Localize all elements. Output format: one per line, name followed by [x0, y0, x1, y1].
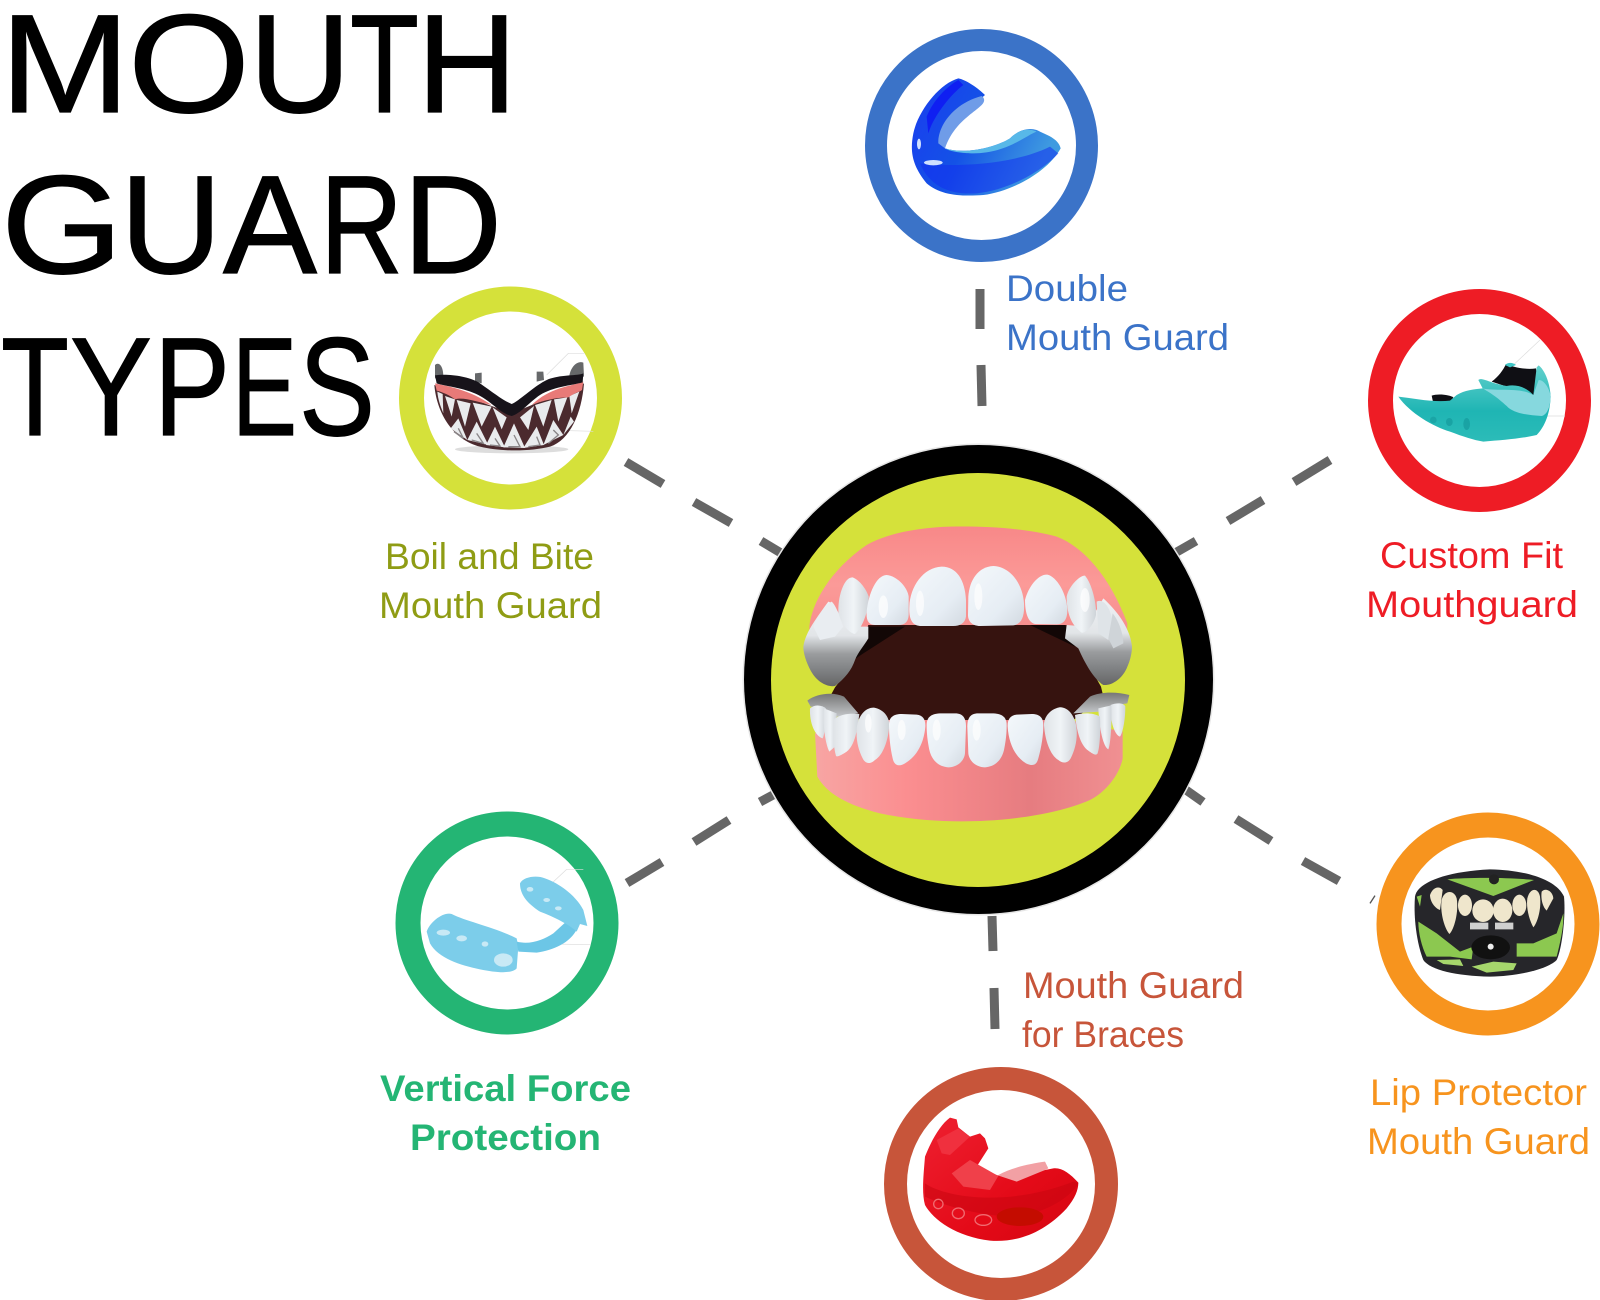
panel: boil and bite guard — [379, 299, 610, 626]
label: vertical force protection: Vertical Force — [380, 1068, 631, 1109]
label: double mouth guard: Double — [1006, 268, 1128, 309]
icon: green monster guard — [1370, 869, 1564, 977]
label: lip protector mouth guard: Mouth Guard — [1367, 1121, 1590, 1162]
title — [0, 0, 517, 465]
connector: lower right dashes — [1186, 790, 1339, 881]
title: T — [1, 308, 69, 465]
connector: top dashes — [980, 289, 982, 406]
ring: red — [1380, 302, 1578, 500]
panel: mouth guard for braces — [896, 965, 1244, 1290]
title: R — [320, 146, 403, 303]
title: U — [120, 146, 222, 303]
label: mouth guard for braces: for Braces — [1022, 1014, 1184, 1055]
connector: bottom dashes — [992, 916, 995, 1029]
icon: teal mouth guard — [1398, 340, 1565, 442]
ring: brown-orange — [896, 1078, 1106, 1290]
title: G — [1, 146, 123, 303]
connector: lower left dashes — [627, 795, 773, 883]
panel: custom fit mouthguard — [1366, 302, 1578, 625]
label: custom fit mouthguard: Custom Fit — [1380, 535, 1564, 576]
icon: light blue guard — [427, 869, 590, 972]
ring: orange — [1389, 825, 1587, 1023]
label: mouth guard for braces: Mouth Guard — [1023, 965, 1244, 1006]
panel: vertical force protection — [380, 824, 631, 1158]
panel: double mouth guard — [876, 40, 1229, 358]
connector: upper right dashes — [1175, 460, 1330, 553]
ring: blue — [876, 40, 1087, 251]
panel: lip protector mouth guard — [1367, 825, 1590, 1162]
label: lip protector mouth guard — [1367, 1072, 1590, 1162]
connector: upper left dashes — [626, 462, 781, 553]
icon: fanged mouth guard — [434, 353, 593, 453]
icon: blue mouth guard — [912, 78, 1061, 196]
illustration: open mouth with teeth — [803, 527, 1132, 821]
title: Y — [70, 308, 152, 465]
label: lip protector mouth guard: Lip Protector — [1370, 1072, 1587, 1113]
label: custom fit mouthguard — [1366, 535, 1578, 625]
ring: green — [408, 824, 606, 1022]
title: E — [232, 308, 297, 465]
label: mouth guard for braces — [1022, 965, 1244, 1055]
title: A — [223, 146, 318, 303]
label: boil and bite — [379, 536, 602, 626]
title: D — [403, 146, 502, 303]
icon: red mouth guard — [923, 1118, 1078, 1241]
label: vertical force protection — [380, 1068, 631, 1158]
label: custom fit mouthguard: Mouthguard — [1366, 584, 1578, 625]
label: double mouth guard: Mouth Guard — [1006, 317, 1229, 358]
panel: central teeth circle — [742, 444, 1214, 916]
label: vertical force protection: Protection — [410, 1117, 601, 1158]
label: boil and bite: Boil and Bite — [385, 536, 594, 577]
ring: lime — [412, 299, 610, 497]
title: S — [299, 308, 375, 465]
label: boil and bite: Mouth Guard — [379, 585, 602, 626]
label: double mouth guard — [1006, 268, 1229, 358]
title: P — [154, 308, 230, 465]
